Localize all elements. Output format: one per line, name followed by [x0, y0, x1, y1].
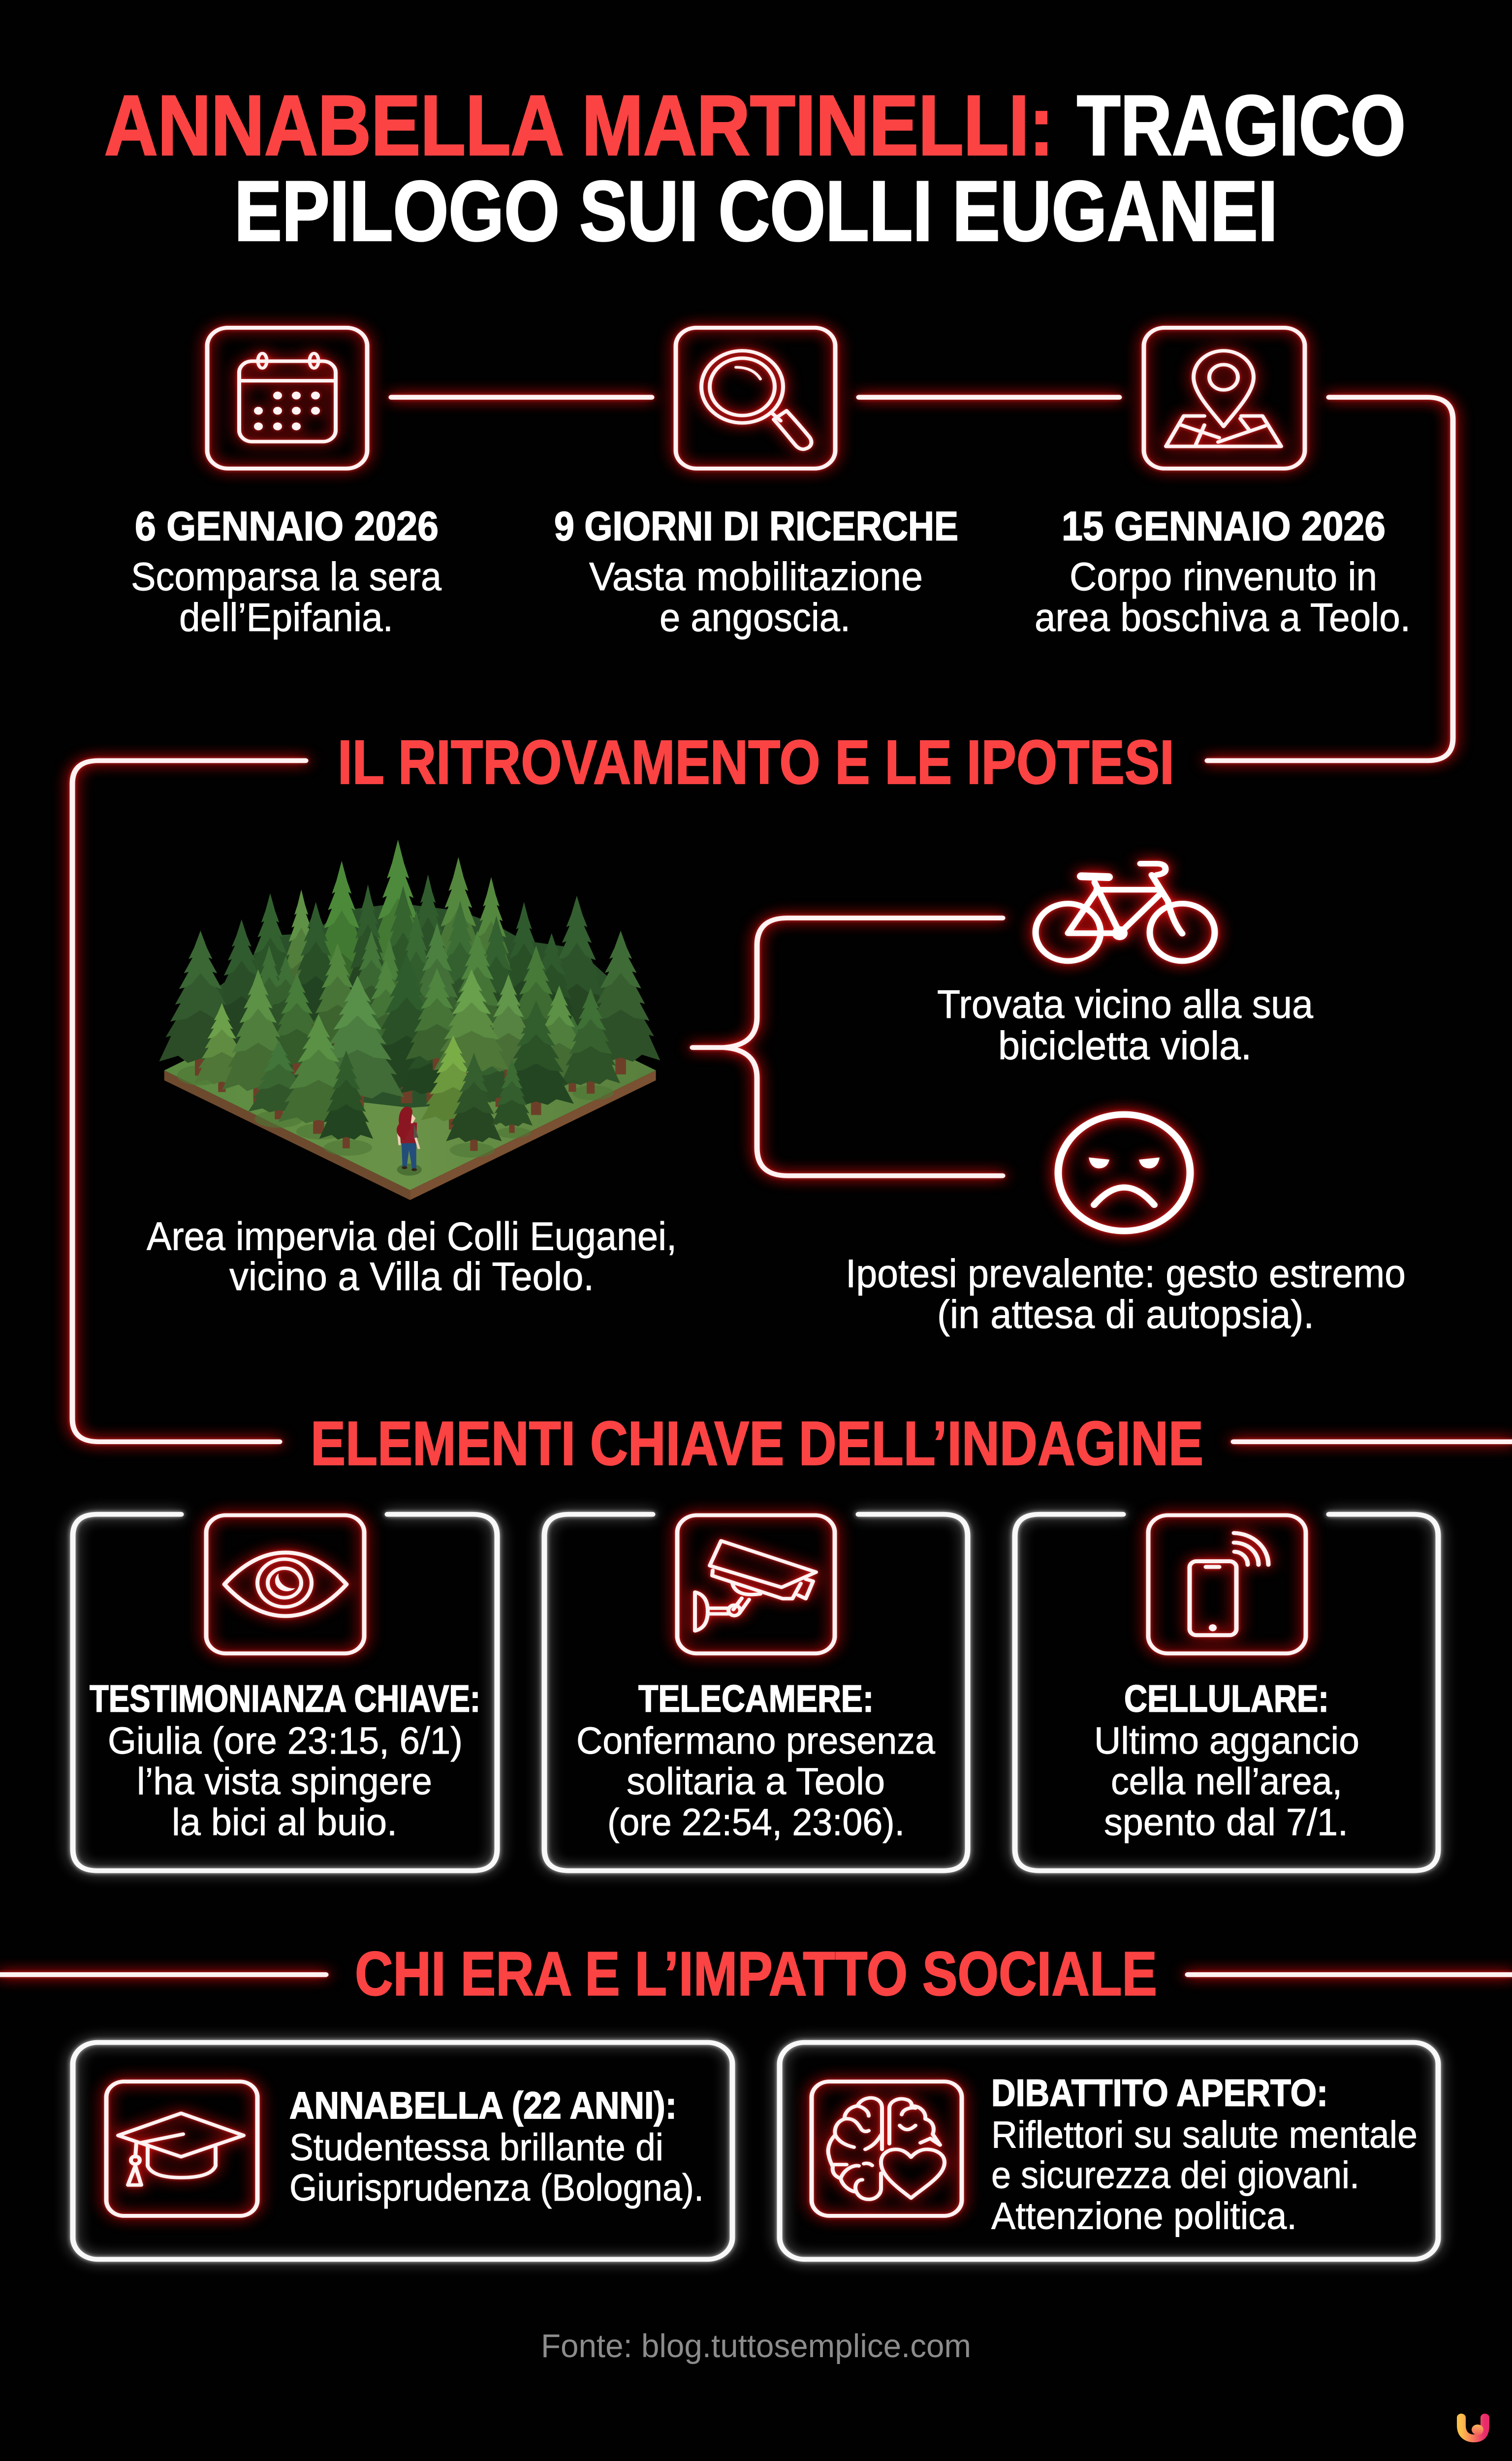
card frame [780, 2043, 1438, 2259]
text: cellulare: cella nell’area, [1111, 1761, 1342, 1802]
text: testimonianza: l’ha vista spingere [137, 1761, 432, 1802]
connector: timeline lines to next section [391, 397, 1453, 760]
figure: woman in red [397, 1106, 422, 1176]
caption: bicycle: Trovata vicino alla sua [937, 982, 1313, 1027]
text: annabella: ANNABELLA (22 ANNI): [289, 2085, 677, 2127]
text: cellulare [1094, 1678, 1359, 1843]
text: testimonianza: Giulia (ore 23:15, 6/1) [108, 1720, 463, 1762]
icon: graduation cap [106, 2082, 257, 2216]
text: dibattito [991, 2072, 1418, 2237]
text: dibattito: e sicurezza dei giovani. [991, 2154, 1359, 2196]
icon: brain and heart [812, 2082, 962, 2216]
date: 9 giorni: Vasta mobilitazione [589, 555, 923, 599]
trees [159, 840, 660, 1151]
text: telecamere: solitaria a Teolo [627, 1761, 885, 1802]
icon: eye [206, 1515, 364, 1653]
caption: bicycle [937, 982, 1313, 1068]
date: 9 giorni: e angoscia. [660, 596, 850, 640]
date: 15 gennaio: 15 GENNAIO 2026 [1062, 503, 1386, 549]
text: telecamere: Confermano presenza [576, 1720, 935, 1762]
icon: bicycle [1036, 864, 1215, 961]
caption: forest area [147, 1215, 677, 1299]
text: annabella: Giurisprudenza (Bologna). [289, 2167, 704, 2209]
panel: annabella [73, 2043, 732, 2259]
text: cellulare: CELLULARE: [1124, 1678, 1329, 1720]
text: cellulare: spento dal 7/1. [1104, 1801, 1348, 1843]
caption: hypothesis [846, 1252, 1406, 1337]
icon: sad face [1058, 1114, 1190, 1231]
text: dibattito: Riflettori su salute mentale [991, 2114, 1418, 2156]
caption: forest area: vicino a Villa di Teolo. [229, 1255, 594, 1299]
caption: hypothesis: (in attesa di autopsia). [937, 1293, 1314, 1337]
panel: timeline [131, 328, 1453, 760]
panel: cellulare [1015, 1514, 1438, 1871]
date: 15 gennaio: Corpo rinvenuto in [1070, 555, 1377, 599]
text: telecamere [576, 1678, 935, 1843]
text: testimonianza [90, 1678, 480, 1843]
caption: forest area: Area impervia dei Colli Euganei, [147, 1215, 677, 1259]
date: 6 gennaio [131, 503, 441, 640]
text: telecamere: (ore 22:54, 23:06). [607, 1801, 905, 1843]
icon: calendar [207, 328, 367, 469]
logo [1461, 2418, 1485, 2438]
panel: dibattito [780, 2043, 1438, 2259]
tree mass backing [179, 903, 641, 1108]
title: TRAGICO [1077, 78, 1406, 173]
text: annabella [289, 2085, 704, 2209]
connector: left rail [72, 760, 1512, 1442]
date: 6 gennaio: 6 GENNAIO 2026 [135, 503, 439, 549]
text: dibattito: DIBATTITO APERTO: [991, 2072, 1328, 2114]
source: Fonte: blog.tuttosemplice.com [541, 2328, 971, 2365]
caption: bicycle: bicicletta viola. [998, 1024, 1252, 1068]
card frame [544, 1514, 968, 1871]
date: 9 giorni [554, 503, 958, 640]
title: ANNABELLA MARTINELLI: [104, 78, 1054, 173]
card frame [73, 1514, 497, 1871]
connector: brace [693, 918, 1003, 1176]
date: 9 giorni: 9 GIORNI DI RICERCHE [554, 503, 958, 549]
heading: chi era: CHI ERA E L’IMPATTO SOCIALE [355, 1939, 1157, 2008]
heading: il ritrovamento: IL RITROVAMENTO E LE IPOTESI [338, 727, 1174, 797]
date: 15 gennaio: area boschiva a Teolo. [1035, 596, 1411, 640]
panel: telecamere [544, 1514, 968, 1871]
text: testimonianza: TESTIMONIANZA CHIAVE: [90, 1678, 480, 1720]
illustration: isometric forest [159, 840, 660, 1200]
text: testimonianza: la bici al buio. [172, 1801, 397, 1843]
card frame [73, 2043, 732, 2259]
date: 6 gennaio: dell’Epifania. [179, 596, 393, 640]
ground and soil [164, 950, 656, 1200]
icon: phone with signal [1148, 1515, 1306, 1653]
caption: hypothesis: Ipotesi prevalente: gesto estremo [846, 1252, 1406, 1296]
date: 6 gennaio: Scomparsa la sera [131, 555, 441, 599]
divider: section rule [0, 1972, 1512, 1977]
title [104, 78, 1406, 259]
panel: testimonianza [73, 1514, 497, 1871]
icon: map pin [1144, 328, 1305, 469]
text: telecamere: TELECAMERE: [638, 1678, 874, 1720]
text: annabella: Studentessa brillante di [289, 2127, 663, 2169]
card frame [1015, 1514, 1438, 1871]
text: cellulare: Ultimo aggancio [1094, 1720, 1359, 1762]
text: dibattito: Attenzione politica. [991, 2195, 1297, 2237]
date: 15 gennaio [1035, 503, 1411, 640]
heading: elementi chiave: ELEMENTI CHIAVE DELL’INDAGINE [311, 1409, 1203, 1478]
icon: security camera [677, 1515, 835, 1653]
icon: magnifying glass [676, 328, 835, 469]
